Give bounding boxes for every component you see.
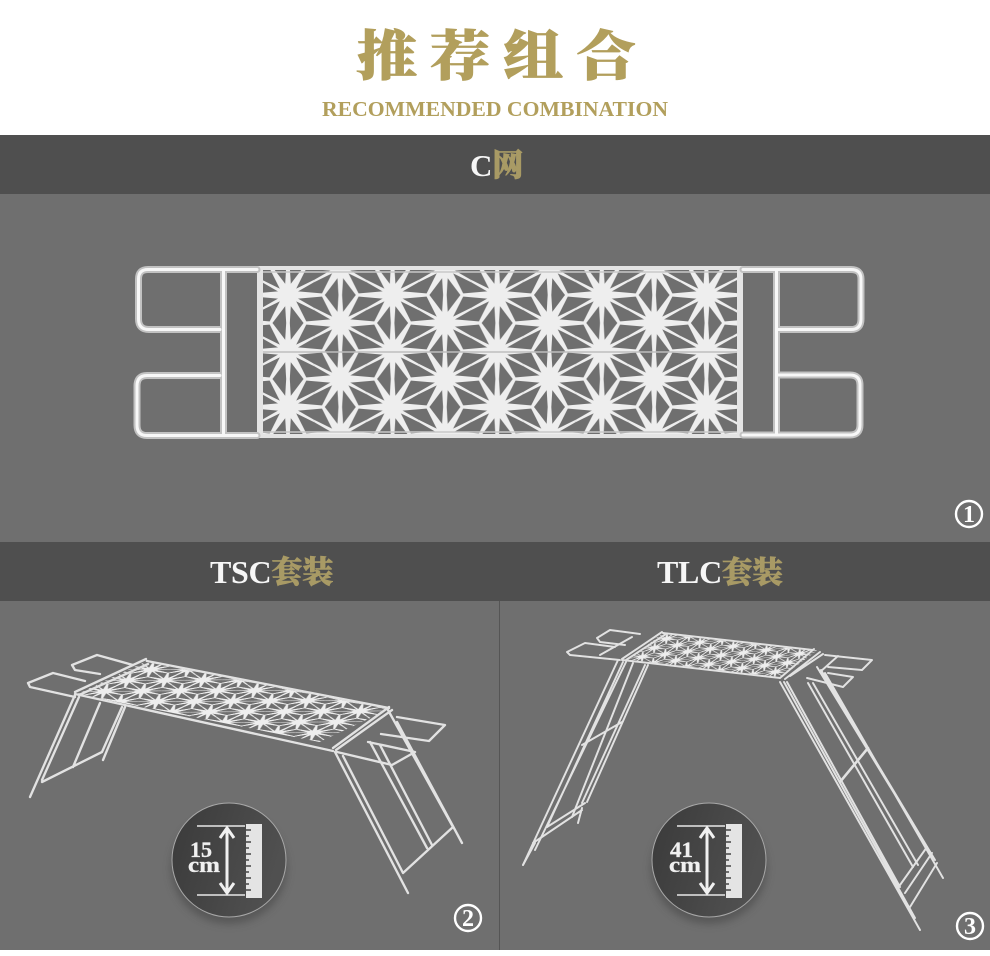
panel background: TLC set	[500, 601, 990, 950]
number badge 1: 1	[963, 502, 975, 528]
number badge 2	[455, 905, 481, 932]
product image: flat C net rack	[137, 266, 861, 437]
rack plate frame and wires	[255, 266, 745, 437]
title: Chinese heading: 推荐组合	[357, 14, 636, 91]
number badge 1	[956, 501, 982, 528]
panel: C net	[0, 135, 990, 542]
TLC rack plate	[626, 633, 817, 678]
height badge: 15 cm: 15	[190, 837, 212, 862]
number badge 3: 3	[964, 914, 976, 940]
height badge: 15 cm: cm	[188, 852, 220, 877]
panel header bar: C net	[0, 135, 990, 194]
left handle loops	[137, 270, 257, 436]
TLC rack wires	[523, 630, 943, 930]
panel background: C net	[0, 194, 990, 542]
TSC rack plate	[77, 661, 389, 742]
height badge: 41 cm: 41	[670, 837, 693, 862]
panel divider	[499, 601, 500, 950]
right handle loops	[743, 270, 861, 435]
panel heading: TSC set: TSC套装	[210, 547, 333, 592]
panel: TLC set	[499, 548, 990, 950]
height badge: 15 cm	[171, 803, 287, 924]
panel header bar: TSC and TLC	[0, 542, 990, 601]
number badge 3	[957, 913, 983, 940]
panel heading: C net: C网	[470, 140, 523, 185]
product image: TSC rack	[28, 655, 462, 893]
height badge: 41 cm	[651, 803, 767, 924]
panel: TSC set	[0, 542, 990, 950]
panel heading: TLC set: TLC套装	[657, 548, 783, 592]
height badge: 41 cm: cm	[669, 852, 701, 877]
TSC rack wires	[28, 655, 462, 893]
rack perforated plate	[257, 266, 742, 437]
subtitle: English heading: RECOMMENDED COMBINATION	[322, 97, 668, 121]
number badge 2: 2	[462, 906, 474, 932]
product image: TLC rack	[523, 630, 943, 930]
panel background: TSC set	[0, 601, 499, 950]
